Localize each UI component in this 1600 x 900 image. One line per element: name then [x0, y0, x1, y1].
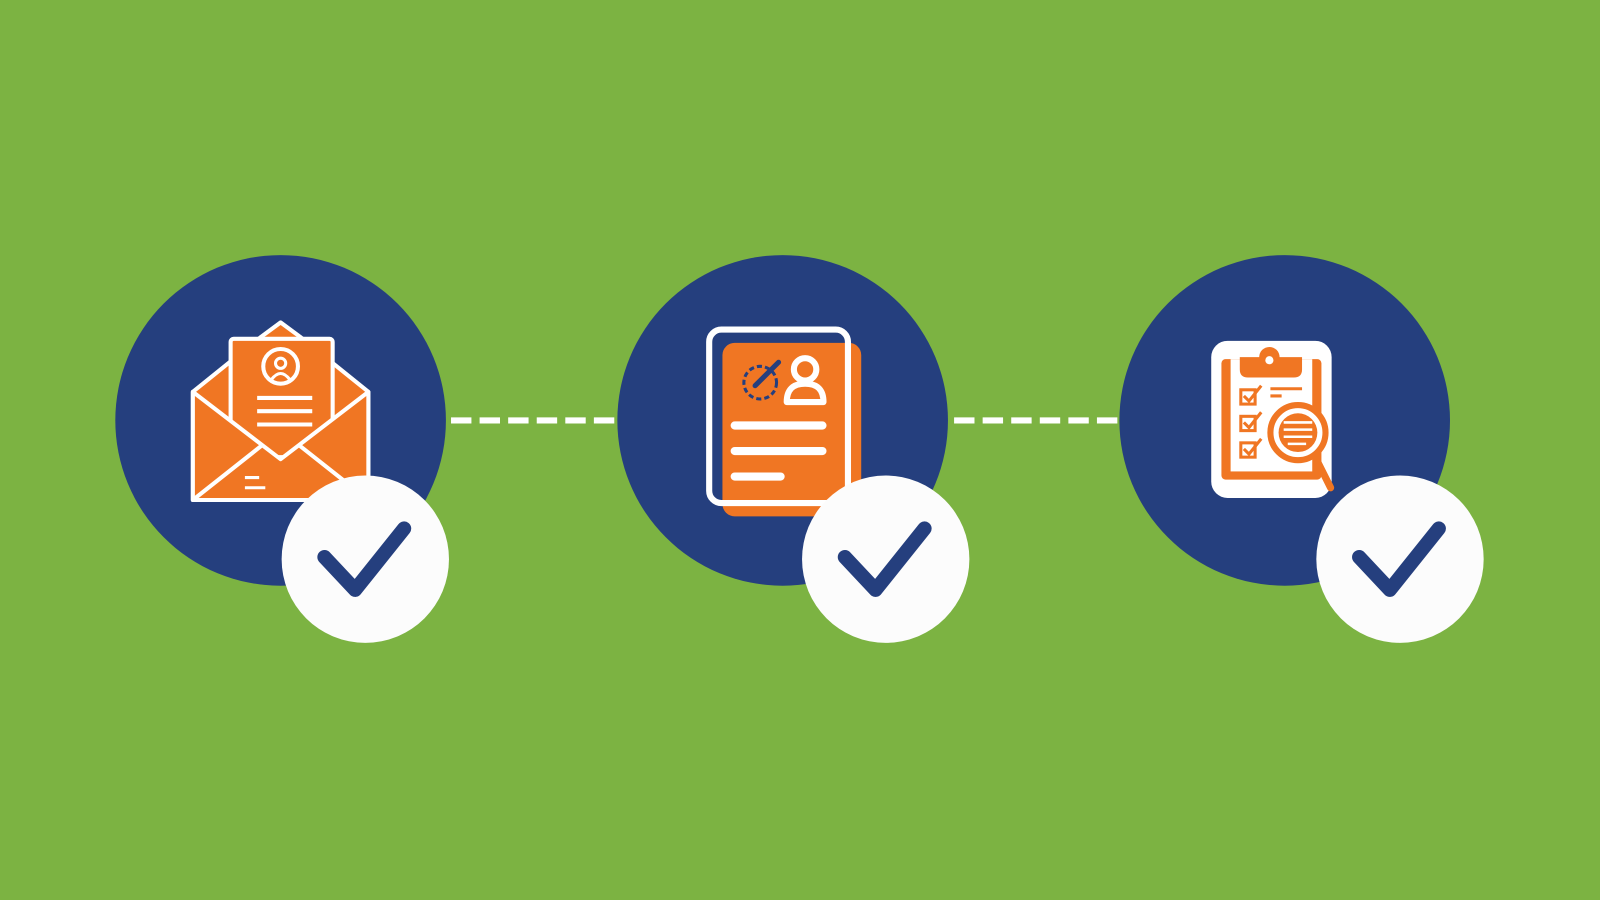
icon: check badge	[282, 476, 449, 643]
icon: check badge	[802, 476, 969, 643]
icon: clipboard with magnifier	[1211, 341, 1332, 498]
panel: step 1 envelope	[115, 255, 449, 643]
arrow: dashed connector 2	[954, 417, 1119, 423]
arrow: dashed connector 1	[451, 417, 614, 423]
icon: check badge	[1316, 476, 1484, 643]
icon: envelope with resume	[193, 322, 368, 500]
icon: profile document	[709, 330, 861, 516]
panel: step 3 checklist clipboard	[1119, 255, 1484, 643]
panel: step 2 profile document	[617, 255, 969, 643]
